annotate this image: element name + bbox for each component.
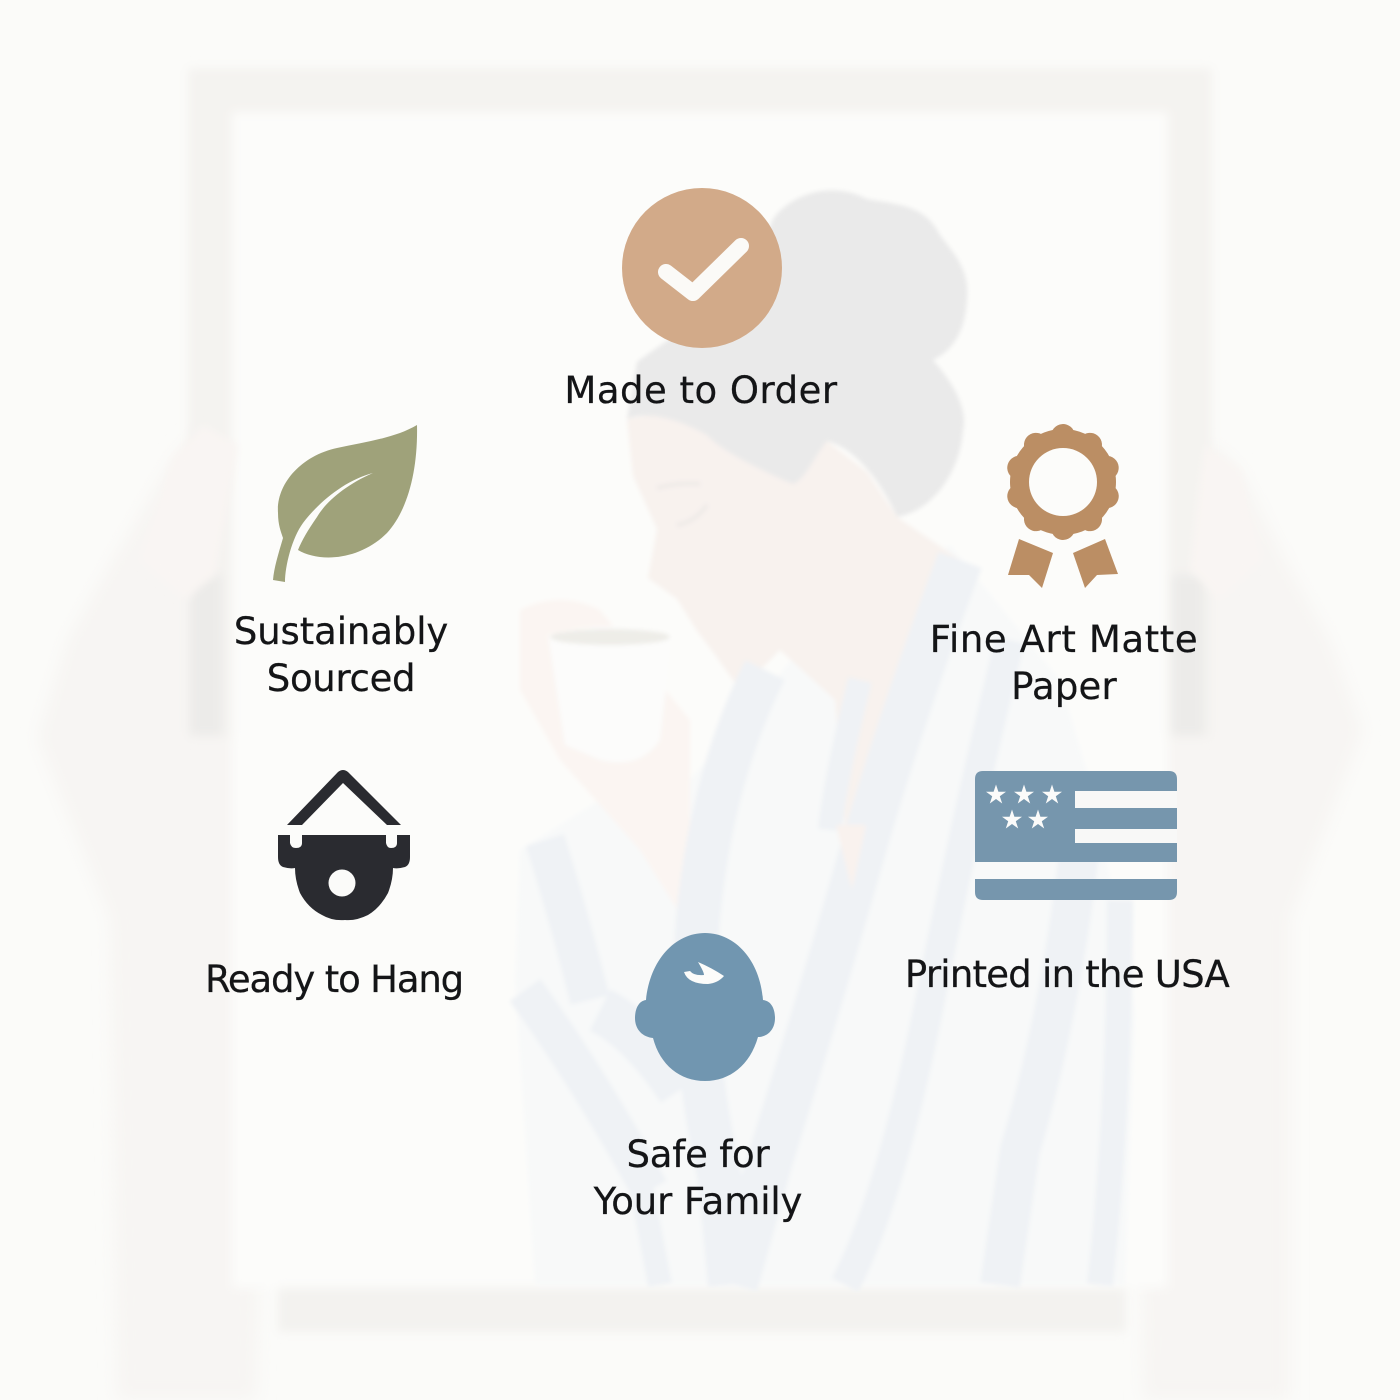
text: Sustainably Sourced: Sustainably xyxy=(234,610,448,653)
cup xyxy=(548,626,672,762)
garment xyxy=(515,545,1135,1285)
text: Safe for Your Family: Your Family xyxy=(594,1180,802,1223)
text: Safe for Your Family: Safe for xyxy=(626,1133,770,1176)
text: Fine Art Matte Paper xyxy=(930,618,1198,708)
hand around cup xyxy=(520,600,690,930)
stripes xyxy=(525,560,1120,1285)
heading: Made to Order: Made to Order xyxy=(564,369,838,412)
text: Safe for Your Family xyxy=(593,1133,802,1223)
text: Ready to Hang: Ready to Hang xyxy=(205,958,463,1001)
eye and brow xyxy=(657,484,707,525)
text: Sustainably Sourced: Sourced xyxy=(267,657,415,700)
hair xyxy=(627,190,967,517)
text: Fine Art Matte Paper: Paper xyxy=(1011,665,1117,708)
neck and chest skin xyxy=(627,411,975,890)
text: Sustainably Sourced xyxy=(234,610,448,700)
text: Fine Art Matte Paper: Fine Art Matte xyxy=(930,618,1198,661)
text: Printed in the USA: Printed in the USA xyxy=(905,953,1229,996)
